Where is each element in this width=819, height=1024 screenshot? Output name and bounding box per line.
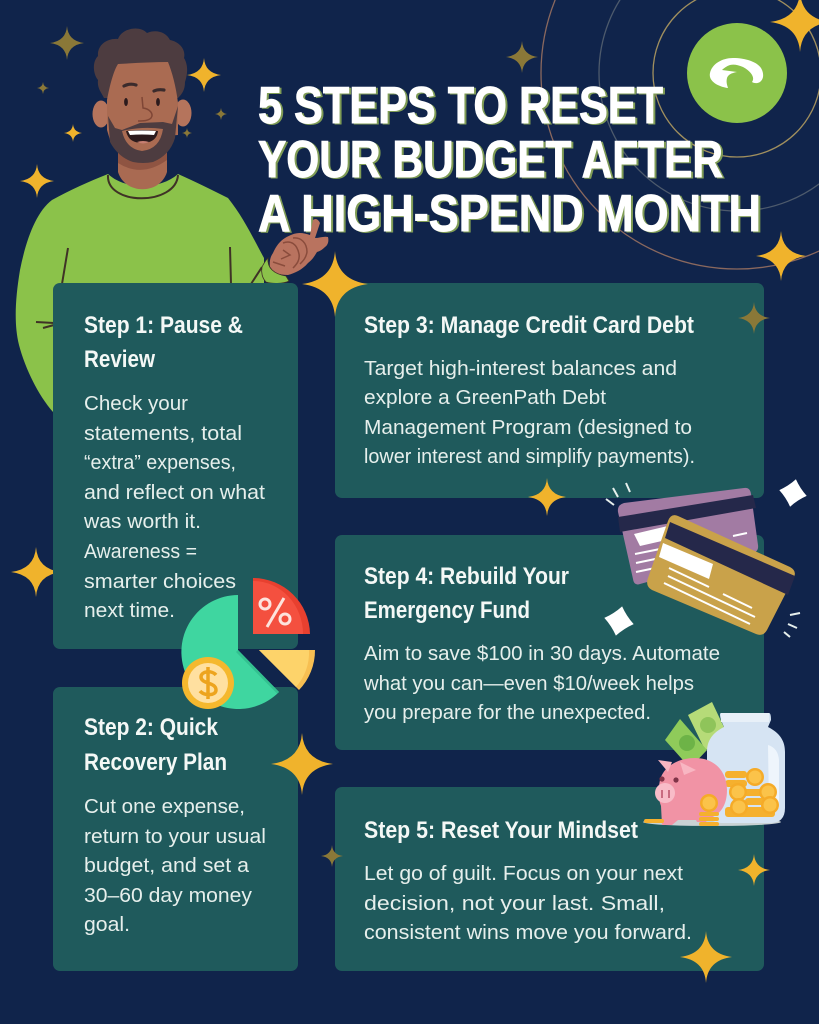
body: step 5 (364, 862, 692, 944)
mouth (126, 130, 158, 143)
body: step 2: 30–60 day money (84, 884, 253, 907)
chin patch (122, 128, 163, 151)
heading: step 1 (84, 312, 243, 373)
body: step 3: explore a GreenPath Debt (364, 386, 606, 409)
white sparkles (601, 476, 810, 639)
sweater (16, 174, 264, 420)
dollar coin (182, 657, 234, 709)
title: YOUR BUDGET AFTER (258, 131, 723, 189)
body: step 1 (83, 392, 265, 622)
percent sign (260, 598, 290, 627)
body: step 1: Awareness = (84, 540, 197, 563)
body: step 1: and reflect on what (84, 481, 265, 504)
heading: step 2: Step 2: Quick (84, 714, 219, 741)
heading: step 4 (364, 563, 569, 624)
background stars (11, 0, 819, 597)
heading: step 2: Recovery Plan (84, 749, 227, 776)
ears (92, 100, 110, 128)
heading: step 1: Review (84, 346, 155, 373)
panel: step 4 (335, 535, 764, 750)
panel: step 5 (335, 787, 764, 971)
body: step 1: statements, total (84, 422, 242, 445)
heading: step 5: Step 5: Reset Your Mindset (364, 817, 638, 844)
orbit rings (541, 0, 819, 269)
body: step 2 (84, 795, 266, 936)
logo badge (687, 23, 787, 123)
heading: step 4: Emergency Fund (364, 597, 530, 624)
hand creases (273, 238, 307, 268)
panel: step 2 (53, 687, 298, 971)
body: step 5: consistent wins move you forward. (364, 921, 692, 944)
body: step 3: Target high-interest balances and (364, 357, 677, 380)
pig (659, 758, 727, 825)
body: step 1: was worth it. (83, 510, 201, 533)
body: step 5: decision, not your last. Small, (364, 892, 665, 915)
cuff (262, 258, 289, 283)
icon: piggy bank and coin jar (643, 702, 785, 826)
character: smiling man in green sweater (16, 28, 328, 420)
body: step 3: Management Program (designed to (364, 416, 692, 439)
body: step 2: return to your usual (84, 825, 266, 848)
body: step 5: Let go of guilt. Focus on your next (364, 862, 683, 885)
sweater creases (36, 247, 262, 328)
face (107, 62, 178, 140)
purple card (618, 488, 758, 584)
body: step 1: smarter choices (84, 570, 236, 593)
neck shadow (118, 150, 167, 170)
jar (707, 713, 785, 823)
icon: pie chart with percent and coin (181, 578, 315, 709)
spark ticks (606, 483, 800, 637)
body: step 1: next time. (84, 599, 175, 622)
body: step 4 (363, 642, 720, 724)
panel: step 1 (53, 283, 298, 649)
body: step 4: you prepare for the unexpected. (364, 701, 651, 724)
hair (94, 28, 187, 98)
panel: step 3 (335, 283, 764, 498)
foreground stars (271, 251, 770, 983)
ground shadow (643, 818, 781, 826)
coins in jar (725, 768, 779, 817)
icon: credit cards (606, 483, 800, 637)
heading: step 1: Step 1: Pause & (84, 312, 243, 339)
hand (270, 219, 328, 275)
body: step 2: Cut one expense, (84, 795, 245, 818)
body: step 3 (364, 357, 695, 468)
beard (108, 106, 178, 163)
body: step 4: what you can—even $10/week helps (363, 672, 694, 695)
money notes (688, 702, 730, 750)
body: step 1: Check your (84, 392, 188, 415)
title: 5 STEPS TO RESET (258, 77, 663, 135)
heading: step 4: Step 4: Rebuild Your (364, 563, 569, 590)
title (258, 77, 761, 243)
coin stack (700, 794, 718, 812)
heading: step 2 (84, 714, 227, 776)
body: step 4: Aim to save $100 in 30 days. Automate (364, 642, 720, 665)
collar (108, 175, 178, 198)
body: step 1: “extra” expenses, (84, 451, 236, 474)
heading: step 3: Step 3: Manage Credit Card Debt (364, 312, 694, 339)
gold card (647, 515, 795, 635)
body: step 3: lower interest and simplify payments). (364, 445, 695, 468)
body: step 2: goal. (84, 913, 130, 936)
neck (118, 145, 167, 189)
body: step 2: budget, and set a (84, 854, 250, 877)
eyes, brows, nose (124, 84, 164, 91)
